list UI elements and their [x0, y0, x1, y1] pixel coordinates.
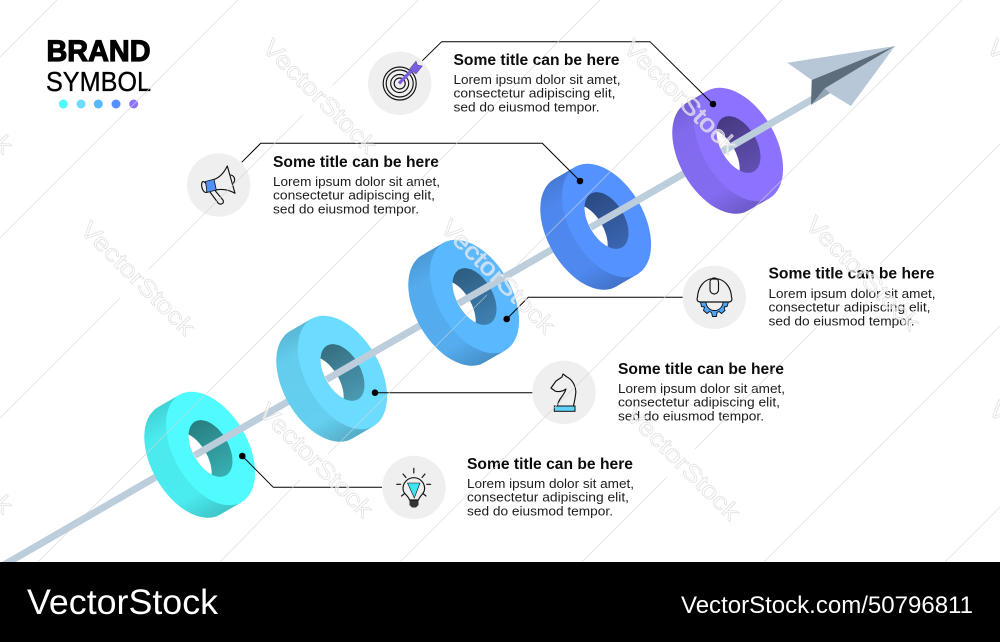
ring 4: blue: [540, 164, 652, 290]
ring 2: light blue: [276, 316, 388, 442]
body text: Lorem ipsum dolor sit amet,: [273, 175, 440, 189]
ring 4 hole: [584, 192, 628, 249]
icon: megaphone: [187, 153, 250, 217]
callout: light bulb, ring 1: [239, 453, 634, 519]
body text: consectetur adipiscing elit,: [273, 189, 435, 203]
body text: sed do eiusmod tempor.: [454, 100, 600, 114]
body text: Lorem ipsum dolor sit amet,: [454, 73, 620, 87]
body text: [618, 382, 785, 423]
body text: consectetur adipiscing elit,: [454, 87, 616, 101]
symbol word: SYMBOL: [46, 66, 151, 97]
ring 1 hole: [188, 420, 232, 477]
watermark overlay: VectorStock: [253, 398, 379, 524]
icon: chess knight: [532, 361, 596, 424]
footer logo: VectorStock: [27, 583, 219, 622]
footer bar: [0, 562, 1000, 642]
brand word: BRAND: [46, 35, 150, 68]
ring 5 hole: [716, 116, 760, 173]
watermark overlay: VectorStock: [800, 211, 926, 337]
ring 1 side: [126, 395, 242, 533]
ring 4 side: [522, 167, 638, 305]
body text: [454, 73, 620, 114]
heading: Some title can be here: [768, 266, 935, 283]
arrow shaft: segment 4: [458, 220, 604, 304]
ring 2 hole: [320, 344, 364, 401]
body text: sed do eiusmod tempor.: [273, 202, 419, 216]
ring 5 face: [675, 72, 802, 217]
callout: chess knight, ring 2: [372, 361, 785, 424]
ring 4 face: [543, 148, 670, 293]
body text: [467, 477, 634, 518]
watermark overlay: VectorStock: [257, 34, 383, 160]
arrow shaft: segment 5: [590, 144, 736, 228]
icon: light bulb: [382, 456, 446, 519]
ring 3 hole: [452, 268, 496, 325]
ring 3: sky blue: [408, 240, 520, 366]
body text: consectetur adipiscing elit,: [467, 491, 629, 505]
watermark overlay: VectorStock: [618, 34, 744, 160]
arrow shaft: segment 3: [326, 296, 472, 380]
body text: sed do eiusmod tempor.: [618, 409, 764, 423]
body text: sed do eiusmod tempor.: [768, 314, 914, 328]
callout: target, ring 5: [368, 42, 716, 115]
body text: sed do eiusmod tempor.: [467, 504, 613, 518]
brand logo: [46, 35, 151, 108]
callout: helmet, ring 3: [503, 266, 936, 329]
ring 3 side: [390, 243, 506, 381]
brand colour dots: [59, 100, 138, 108]
body text: Lorem ipsum dolor sit amet,: [768, 287, 936, 301]
footer url: VectorStock.com/50796811: [681, 592, 973, 619]
body text: [768, 287, 936, 328]
connector to ring 5: [422, 42, 716, 107]
body text: [273, 175, 440, 216]
icon: helmet with gear: [683, 266, 746, 329]
icon: paper plane arrowhead: [787, 46, 895, 106]
body text: consectetur adipiscing elit,: [768, 301, 930, 315]
arrow shaft: segment to plane: [722, 96, 818, 152]
connector to ring 1: [239, 453, 382, 487]
arrow shaft: start: [0, 452, 200, 570]
callout: megaphone, ring 4: [187, 143, 583, 217]
watermark overlay: VectorStock: [435, 214, 561, 340]
ring 5 side: [654, 91, 770, 229]
body text: Lorem ipsum dolor sit amet,: [618, 382, 785, 396]
watermark overlay: VectorStock: [620, 401, 746, 527]
heading: Some title can be here: [467, 456, 633, 473]
connector to ring 4: [242, 143, 583, 184]
heading: Some title can be here: [618, 361, 784, 378]
heading: Some title can be here: [273, 154, 439, 171]
body text: Lorem ipsum dolor sit amet,: [467, 477, 634, 491]
ring 5: purple: [672, 88, 784, 214]
ring 2 face: [279, 300, 406, 445]
ring 2 side: [258, 319, 374, 457]
connector to ring 2: [372, 389, 532, 396]
ring 3 face: [411, 224, 538, 369]
watermark overlay: VectorStock: [75, 216, 201, 342]
connector to ring 3: [503, 297, 683, 322]
ring 1: cyan: [144, 392, 256, 518]
ring 1 face: [147, 376, 274, 521]
icon: target with dart: [368, 52, 431, 115]
arrow shaft: segment 2: [194, 372, 340, 456]
body text: consectetur adipiscing elit,: [618, 396, 780, 410]
heading: Some title can be here: [454, 52, 620, 69]
